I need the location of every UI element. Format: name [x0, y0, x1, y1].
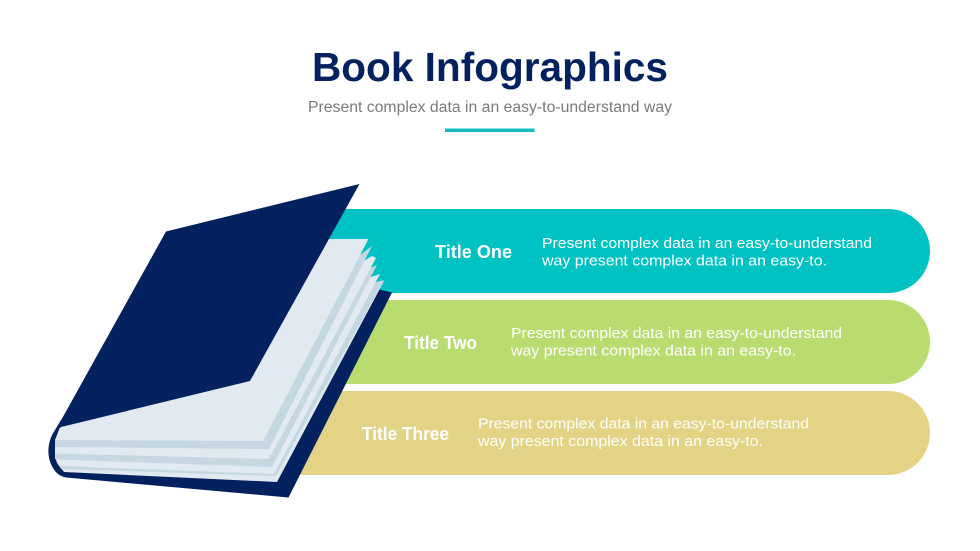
top page [55, 239, 368, 441]
panel: title three band [280, 391, 930, 475]
text block: title one description: Present complex data in an easy-to-understand [542, 235, 872, 252]
heading: title two: Title Two [404, 333, 477, 353]
text block: title one description: way present complex data in an easy-to. [541, 252, 827, 270]
title underline [445, 128, 534, 132]
bottom page [55, 281, 384, 482]
page edge shadow two [55, 265, 377, 467]
panel: title one band [300, 209, 930, 293]
text block: title three description: Present complex data in an easy-to-understand [478, 416, 809, 432]
text block: title three description: way present complex data in an easy-to. [477, 433, 763, 450]
book back cover [48, 280, 392, 498]
second page [55, 256, 376, 459]
heading: title three: Title Three [362, 424, 449, 444]
title: Book Infographics [312, 44, 668, 90]
heading: title one: Title One [435, 242, 512, 262]
text block: title two description: way present complex data in an easy-to. [510, 342, 796, 360]
subtitle: Present complex data in an easy-to-understand way [308, 99, 672, 116]
text block: title two description: Present complex data in an easy-to-understand [511, 325, 842, 342]
book front cover [54, 184, 360, 433]
page edge shadow one [55, 246, 372, 449]
page edge shadow three [55, 280, 384, 476]
panel: title two band [300, 300, 930, 384]
third page [55, 274, 380, 474]
icon: open book [48, 184, 392, 498]
